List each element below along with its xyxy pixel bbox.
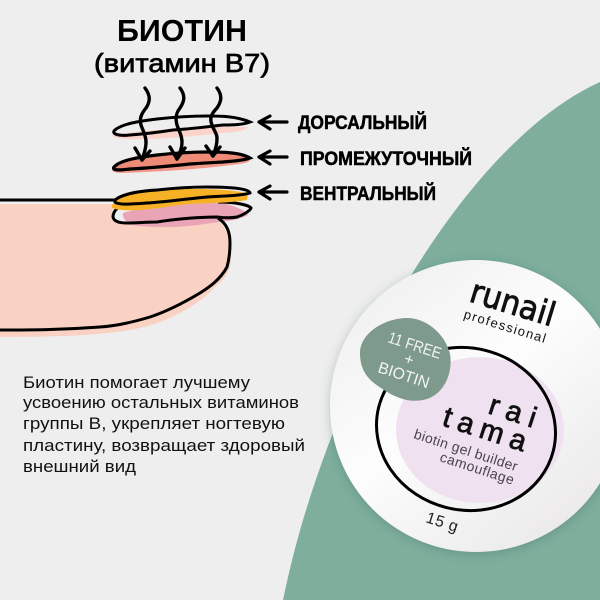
- lilac spot: [396, 357, 564, 503]
- ventral layer: [112, 189, 248, 210]
- layer labels: ДОРСАЛЬНЫЙ: [298, 112, 427, 134]
- layer labels: [298, 112, 472, 205]
- title: (витамин В7): [94, 48, 270, 78]
- finger illustration: [0, 187, 251, 337]
- badge text: 11 FREE: [386, 330, 443, 363]
- product name: rai: [485, 389, 540, 434]
- badge blob: [360, 318, 451, 401]
- description text: группы В, укрепляет ногтевую: [23, 414, 285, 433]
- pointer arrows: [259, 116, 287, 199]
- description text: Биотин помогает лучшему: [23, 373, 251, 392]
- description text: усвоению остальных витаминов: [23, 393, 299, 412]
- product description: camouflage: [438, 449, 516, 488]
- product name: tama: [439, 401, 531, 458]
- description text: [23, 373, 305, 476]
- brand logo: runail: [466, 271, 560, 334]
- nail bed fill: [123, 203, 248, 227]
- dorsal nail layer: [112, 116, 250, 139]
- black ring: [359, 329, 573, 529]
- wavy arrows: [135, 88, 221, 160]
- weight: 15 g: [424, 510, 461, 536]
- green background shape: [283, 82, 600, 600]
- badge text: BIOTIN: [376, 360, 431, 392]
- intermediate nail layer: [112, 152, 250, 173]
- product description: biotin gel builder: [412, 426, 520, 474]
- title: [94, 13, 270, 78]
- brand logo: professional: [462, 307, 548, 346]
- title: БИОТИН: [117, 13, 247, 48]
- description text: пластину, возвращает здоровый: [23, 436, 305, 455]
- layer labels: ВЕНТРАЛЬНЫЙ: [300, 183, 436, 205]
- layer labels: ПРОМЕЖУТОЧНЫЙ: [300, 148, 472, 170]
- product jar lid: [330, 260, 600, 552]
- badge text: +: [402, 351, 416, 370]
- description text: внешний вид: [23, 457, 136, 476]
- badge text: [376, 330, 443, 392]
